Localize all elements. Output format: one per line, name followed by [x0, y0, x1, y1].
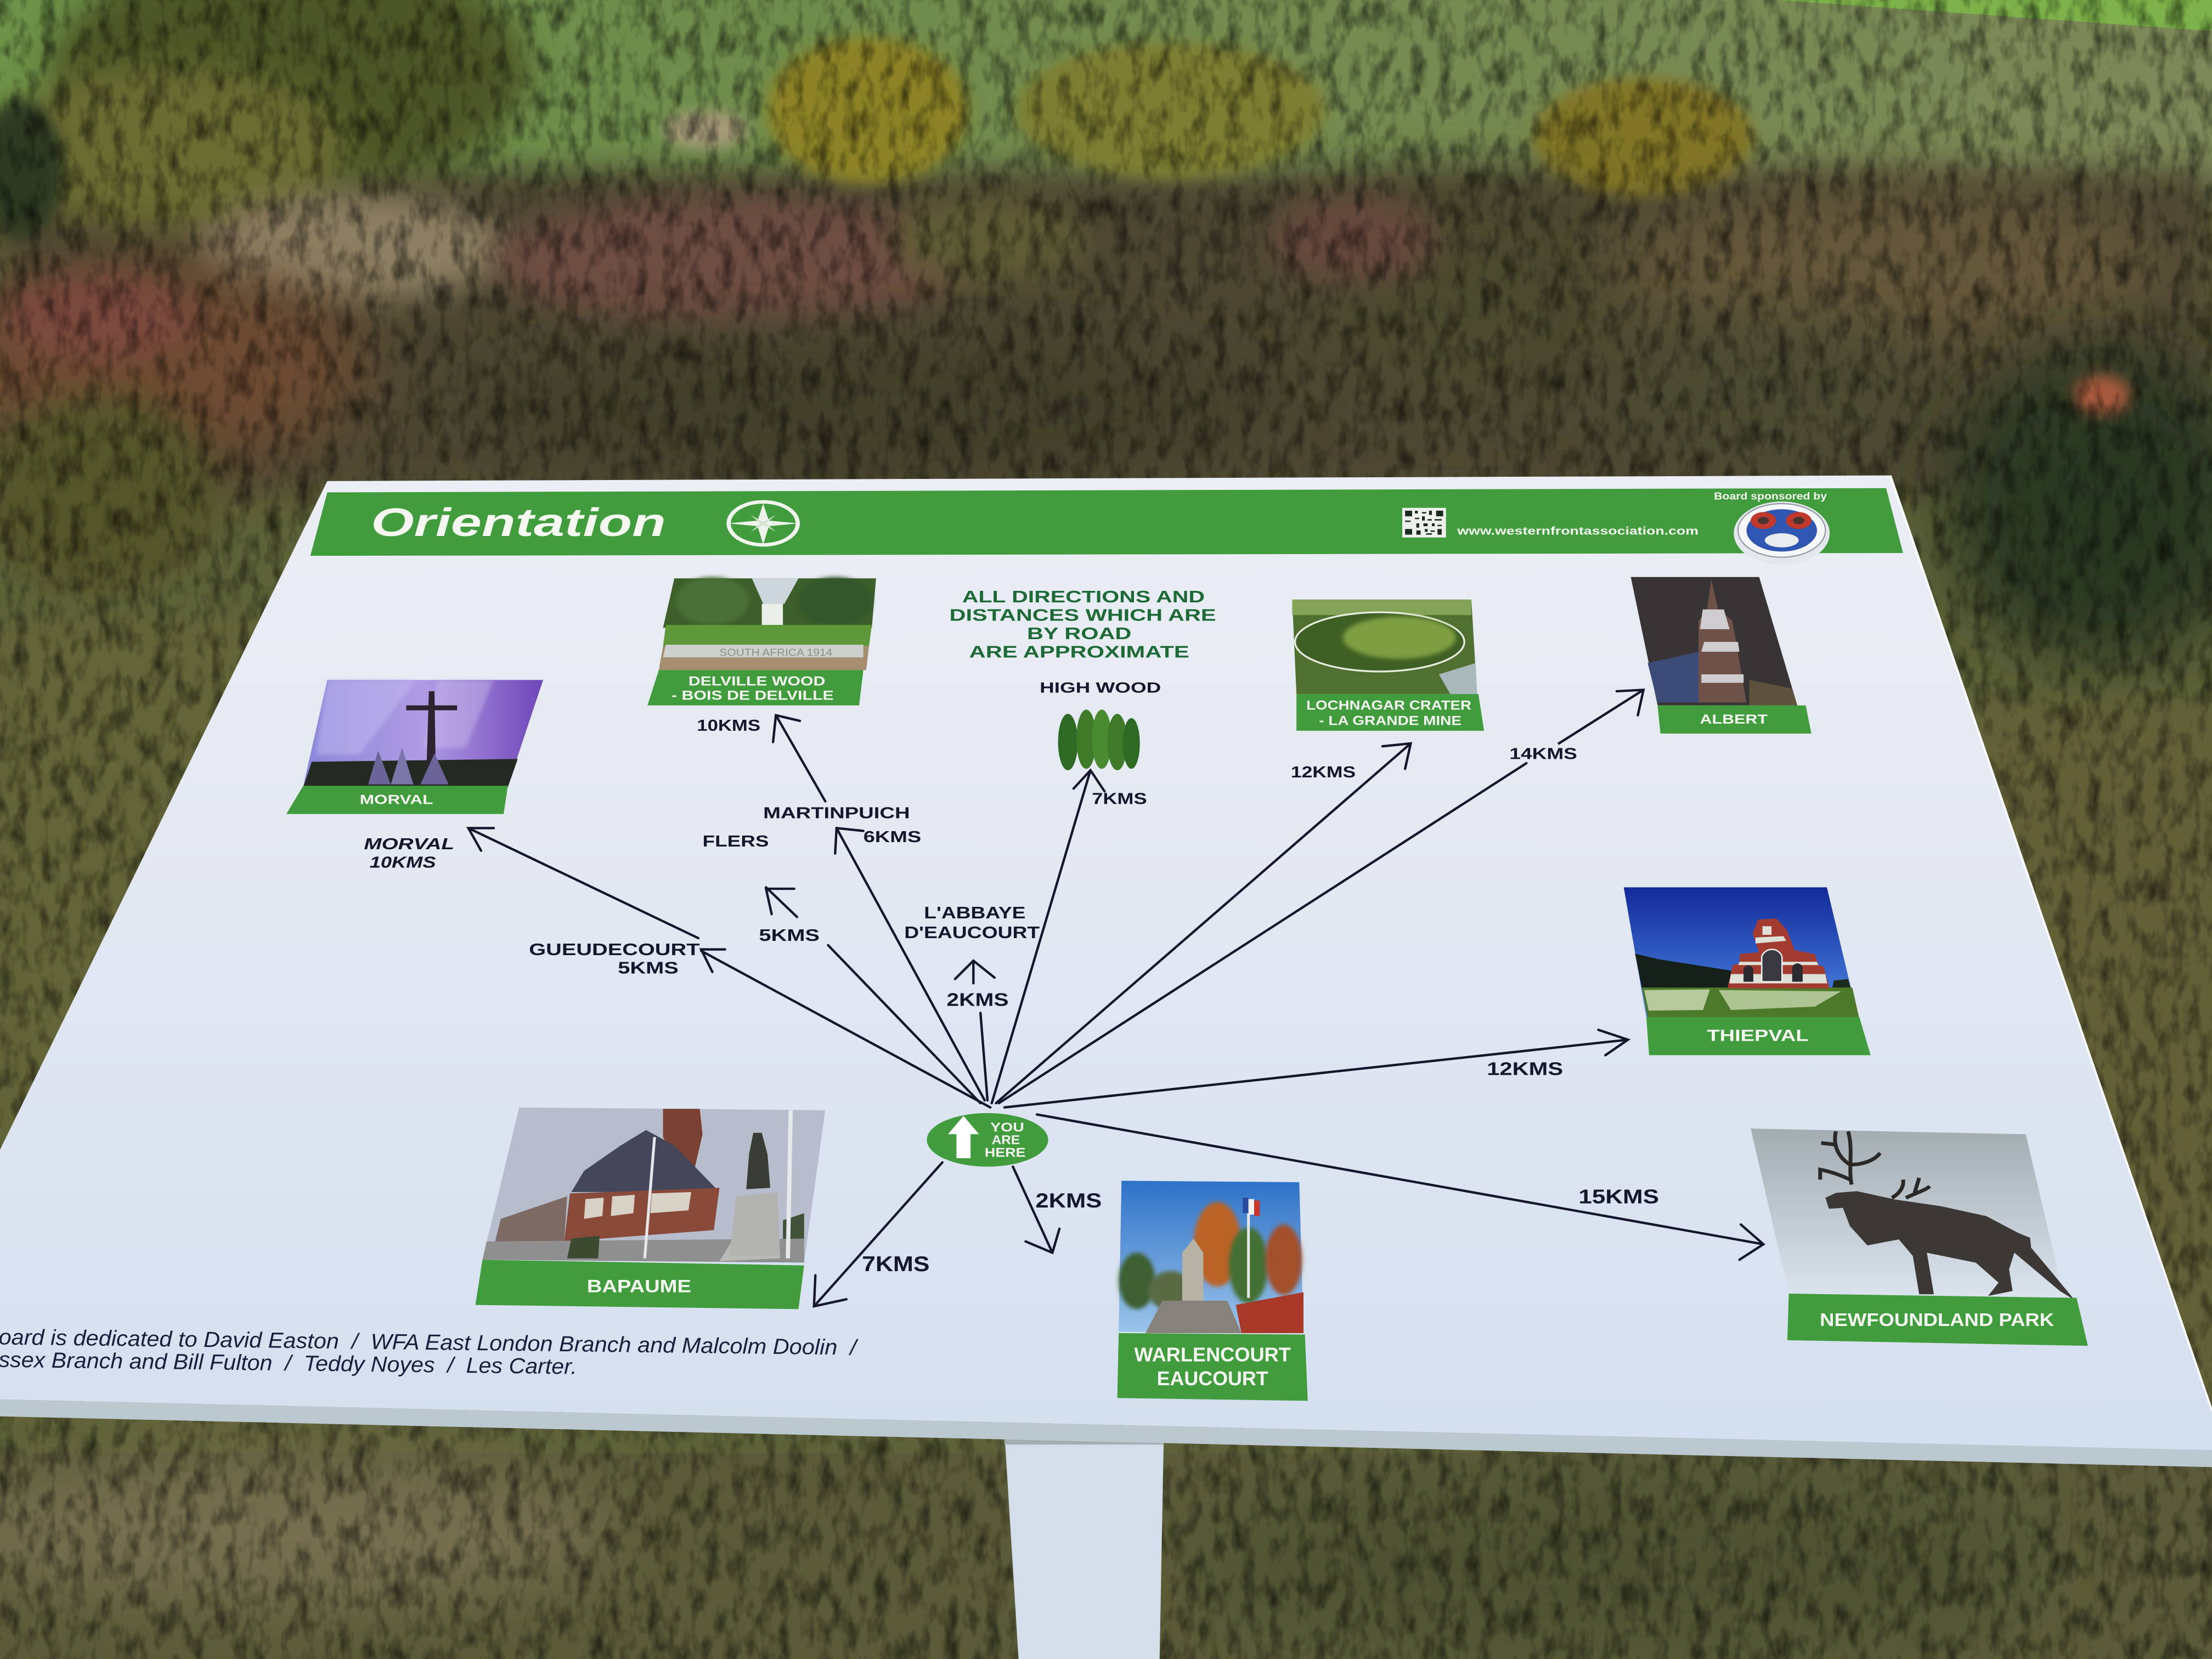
arrow: Albert upper	[1559, 690, 1644, 743]
label: 7kms High Wood: 7KMS	[1092, 790, 1147, 808]
you are here marker: ARE	[992, 1132, 1020, 1147]
label: Morval 10kms: MORVAL	[364, 835, 454, 853]
arrow: Morval	[469, 828, 698, 938]
memorial inscription: SOUTH AFRICA 1914	[719, 647, 832, 658]
label: Flers: FLERS	[703, 832, 769, 850]
arrow: Albert lower	[999, 763, 1526, 1103]
label: Thiepval: THIEPVAL	[1707, 1027, 1809, 1045]
note: directions are approximate: ALL DIRECTIONS AND	[962, 587, 1205, 606]
icon: High Wood trees	[1058, 709, 1140, 770]
photo card: Bapaume	[476, 1108, 825, 1309]
label: 12kms Lochnagar: 12KMS	[1291, 763, 1356, 781]
label: L'Abbaye d'Eaucourt	[904, 903, 1040, 942]
arrow: Flers	[766, 887, 980, 1103]
photo card: Warlencourt Eaucourt	[1118, 1181, 1308, 1401]
photo card: Morval	[286, 680, 543, 814]
icon: compass rose	[726, 500, 800, 546]
direction arrows	[469, 690, 1763, 1306]
photo card: Albert	[1631, 577, 1812, 733]
QR code	[1402, 508, 1446, 538]
panel: orientation board	[0, 476, 2212, 1467]
caribou statue	[1820, 1131, 2074, 1300]
arrow: Delville Wood	[773, 715, 825, 802]
label: 5kms Flers: 5KMS	[759, 926, 820, 945]
label: 12kms Thiepval: 12KMS	[1487, 1059, 1563, 1079]
arrow: Gueudecourt	[701, 950, 990, 1108]
you are here marker	[927, 1113, 1048, 1167]
label: Gueudecourt 5kms	[529, 940, 700, 977]
photo card: Thiepval	[1624, 887, 1871, 1055]
sponsor caption: Board sponsored by	[1714, 490, 1827, 501]
label: 7kms Bapaume: 7KMS	[862, 1252, 930, 1276]
dedication text: oard is dedicated to David Easton / WFA East London Branch and Malcolm Doolin /	[0, 1325, 859, 1360]
label: Newfoundland Park: NEWFOUNDLAND PARK	[1820, 1310, 2054, 1330]
label: Delville Wood: DELVILLE WOOD	[689, 674, 825, 689]
label: Morval 10kms	[364, 835, 454, 871]
label: Martinpuich: MARTINPUICH	[763, 804, 910, 821]
label: Lochnagar Crater: LOCHNAGAR CRATER	[1306, 698, 1471, 713]
arrow: Thiepval	[1005, 1030, 1628, 1108]
label: Delville 10kms: 10KMS	[697, 716, 760, 734]
note: directions are approximate	[950, 587, 1216, 661]
heading: Orientation: Orientation	[371, 501, 666, 545]
website url: www.westernfrontassociation.com	[1457, 525, 1699, 538]
arrow: Newfoundland	[1037, 1114, 1763, 1260]
note: directions are approximate: ARE APPROXIMATE	[969, 642, 1189, 661]
dedication text: ssex Branch and Bill Fulton / Teddy Noyes / Les Carter.	[0, 1348, 577, 1379]
label: Gueudecourt 5kms: 5KMS	[618, 958, 679, 977]
label: 2kms Warlencourt: 2KMS	[1035, 1189, 1102, 1212]
label: Eaucourt: EAUCOURT	[1157, 1367, 1268, 1390]
signpost pole	[1005, 1432, 1164, 1659]
label: Gueudecourt 5kms: GUEUDECOURT	[529, 940, 700, 959]
you are here marker: YOU	[990, 1120, 1024, 1134]
icon: Western Front Association logo	[1734, 501, 1830, 565]
label: Morval 10kms: 10KMS	[370, 853, 436, 871]
note: directions are approximate: BY ROAD	[1027, 624, 1131, 643]
label: Bois de Delville: - BOIS DE DELVILLE	[672, 688, 834, 703]
label: 15kms Newfoundland: 15KMS	[1578, 1185, 1659, 1207]
arrow: Martinpuich	[835, 828, 985, 1101]
arrow: Abbaye	[955, 961, 995, 1101]
label: L'Abbaye d'Eaucourt: D'EAUCOURT	[904, 923, 1040, 942]
arrow: High Wood	[992, 770, 1104, 1103]
arrow: Lochnagar	[996, 743, 1410, 1103]
label: 2kms Abbaye: 2KMS	[946, 990, 1009, 1010]
label: Warlencourt: WARLENCOURT	[1134, 1343, 1291, 1365]
arrow: Bapaume	[814, 1163, 943, 1306]
you are here marker: HERE	[985, 1146, 1025, 1160]
note: directions are approximate: DISTANCES WHICH ARE	[950, 605, 1216, 624]
label: 14kms Albert: 14KMS	[1509, 744, 1577, 762]
arrow: Warlencourt	[1013, 1167, 1059, 1252]
label: 6kms: 6KMS	[864, 828, 921, 845]
label: La Grande Mine: - LA GRANDE MINE	[1319, 714, 1462, 729]
label: High Wood: HIGH WOOD	[1040, 680, 1161, 696]
label: L'Abbaye d'Eaucourt: L'ABBAYE	[924, 903, 1025, 922]
label: Albert: ALBERT	[1700, 712, 1768, 727]
photo card: Delville Wood	[647, 577, 876, 706]
label: Bapaume: BAPAUME	[587, 1276, 691, 1296]
header bar	[311, 488, 1903, 556]
photo card: Newfoundland Park	[1751, 1128, 2088, 1346]
label: Morval: MORVAL	[360, 793, 433, 808]
dedication text	[0, 1325, 859, 1379]
photo card: Lochnagar Crater	[1292, 600, 1484, 731]
